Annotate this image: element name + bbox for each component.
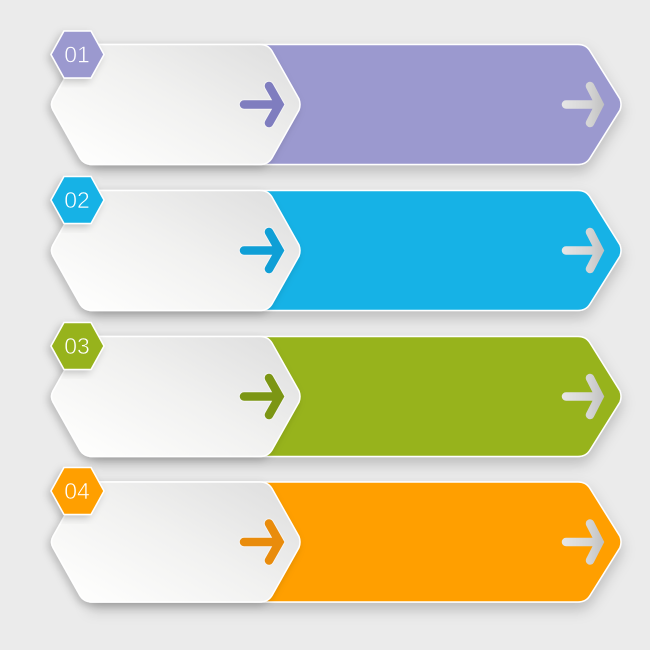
number badge 04 bbox=[51, 468, 104, 514]
number badge 01: 01 bbox=[64, 42, 90, 68]
panel: step 03 bbox=[51, 322, 621, 456]
colored arrow banner 04 bbox=[90, 482, 621, 602]
icon: arrow inside white panel 02 bbox=[244, 232, 280, 269]
white label panel 02 bbox=[52, 190, 300, 310]
number badge 03: 03 bbox=[64, 333, 90, 359]
colored arrow banner 03 bbox=[90, 336, 621, 456]
icon: arrow on colored banner 01 bbox=[566, 86, 600, 123]
white label panel 03 bbox=[52, 336, 300, 456]
panel: step 04 bbox=[51, 468, 621, 602]
icon: arrow inside white panel 01 bbox=[244, 86, 280, 123]
panel: step 02 bbox=[51, 176, 621, 310]
icon: arrow inside white panel 03 bbox=[244, 378, 280, 415]
number badge 02: 02 bbox=[64, 187, 90, 213]
number badge 03 bbox=[51, 322, 104, 370]
icon: arrow on colored banner 04 bbox=[566, 524, 600, 560]
icon: arrow on colored banner 02 bbox=[566, 232, 600, 269]
colored arrow banner 02 bbox=[90, 190, 621, 310]
panel: step 01 bbox=[51, 31, 621, 164]
number badge 01 bbox=[51, 31, 104, 78]
white label panel 01 bbox=[52, 44, 300, 164]
icon: arrow on colored banner 03 bbox=[566, 378, 600, 415]
icon: arrow inside white panel 04 bbox=[244, 524, 280, 560]
number badge 04: 04 bbox=[64, 478, 90, 504]
white label panel 04 bbox=[52, 482, 300, 602]
number badge 02 bbox=[51, 176, 104, 224]
colored arrow banner 01 bbox=[90, 44, 621, 164]
